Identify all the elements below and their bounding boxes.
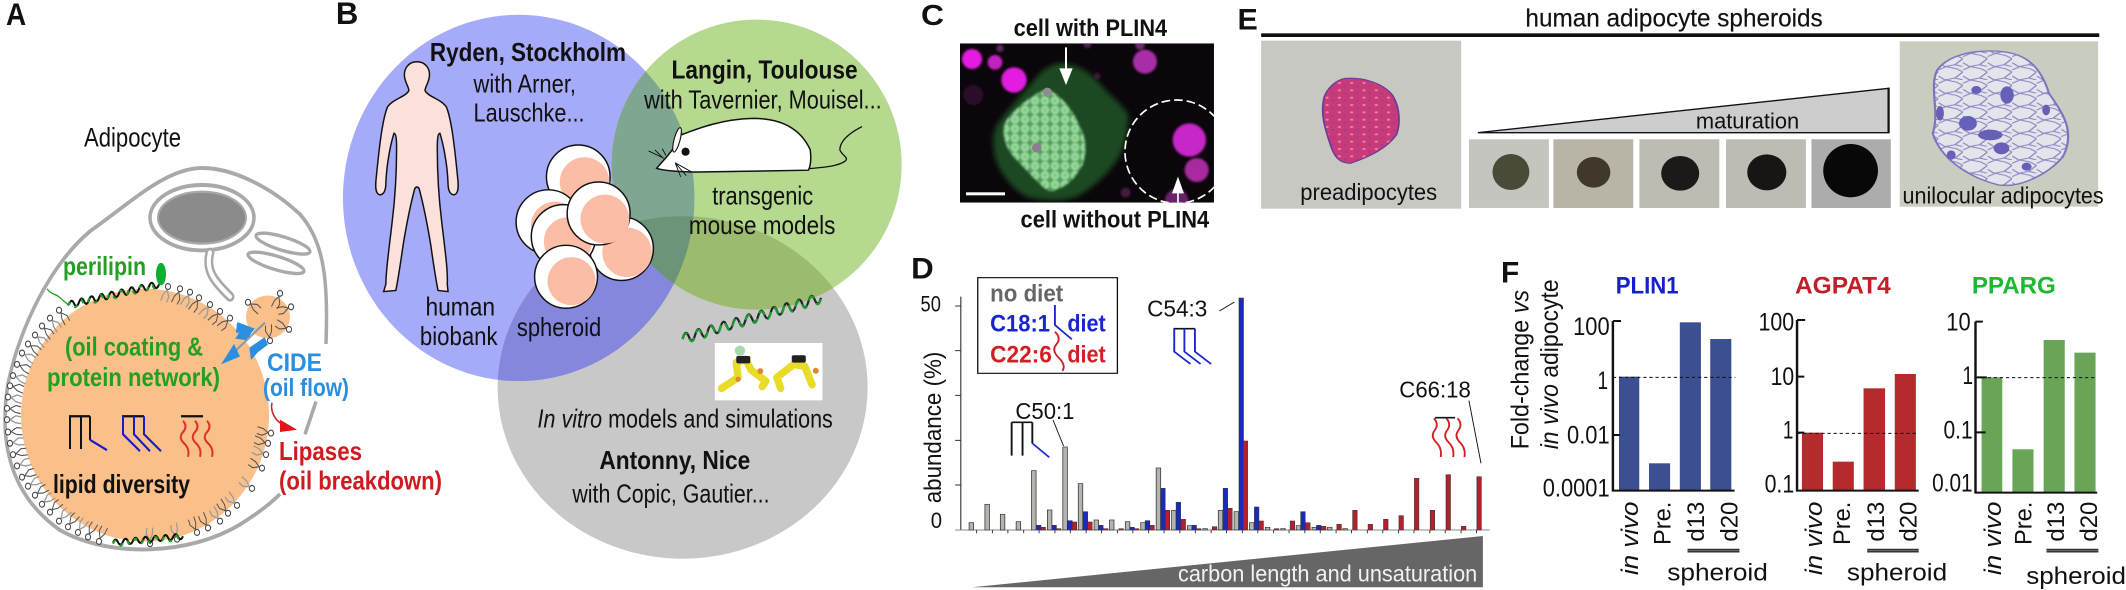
CIDE protein and oil flow arrow (221, 323, 266, 364)
icon: human body (376, 62, 458, 292)
heading: Adipocyte: Adipocyte (84, 123, 181, 153)
label: cell without PLIN4: cell without PLIN4 (1021, 207, 1210, 233)
label maturation: maturation (1696, 109, 1799, 133)
preadipocyte image (1261, 41, 1461, 209)
label lipid diversity: lipid diversity (53, 471, 190, 499)
chart: PPARG: in vivo (1979, 502, 2007, 575)
chart: PLIN1: 0.0001 (1543, 474, 1610, 502)
icon: spheroid of cells (516, 145, 653, 308)
text: Toulouse: Langin, Toulouse (672, 56, 858, 84)
y axis tick labels: 0 (931, 508, 942, 533)
chart: AGPAT4: in vivo (1800, 502, 1827, 575)
panel D: lipidomics bar chart (911, 252, 1490, 587)
chart: PPARG: 1 (1963, 362, 1973, 389)
text: transgenic mouse models: mouse models (689, 212, 835, 240)
legend: diet (1067, 311, 1106, 337)
carbon length wedge (972, 536, 1483, 587)
annotation C54:3: C54:3 (1147, 297, 1207, 322)
chart: PPARG: 0.01 (1932, 469, 1973, 497)
nucleus (150, 185, 254, 250)
header rule (1261, 33, 2099, 37)
chart: PPARG: 0.1 (1943, 416, 1973, 444)
phospholipid monolayer (4, 283, 294, 547)
text: Stockholm: Ryden, Stockholm (430, 39, 626, 67)
label CIDE (263, 349, 349, 401)
label F: F (1501, 255, 1519, 289)
label CIDE: CIDE (267, 349, 322, 376)
heading: human adipocyte spheroids (1525, 4, 1823, 32)
text: Stockholm (430, 39, 626, 127)
text: Stockholm: Lauschke... (474, 99, 585, 127)
label E: E (1238, 2, 1258, 36)
label lipases: (oil breakdown) (279, 467, 442, 496)
legend: no diet (990, 281, 1064, 307)
label perilipin: perilipin (63, 253, 146, 282)
chart: PLIN1: d13 (1682, 502, 1710, 542)
text: Toulouse (643, 56, 882, 114)
fluorescence image (960, 43, 1214, 203)
lipid structure polyunsaturated (181, 416, 212, 457)
C18:1 diet bars (1036, 298, 1321, 530)
annotation C66:18: C66:18 (1399, 378, 1471, 403)
label lipases (279, 438, 442, 496)
lipid structure monounsaturated (122, 416, 161, 451)
panel E: human adipocyte spheroids (1261, 4, 2104, 209)
y axis title: abundance (%) (919, 352, 946, 503)
unilocular adipocyte image (1900, 41, 2104, 208)
text: Nice: Antonny, Nice (599, 447, 750, 475)
label oil coating (47, 333, 220, 392)
chart: AGPAT4: 0.1 (1765, 470, 1794, 498)
chart: AGPAT4: 100 (1759, 308, 1794, 336)
panel C: microscopy (921, 0, 1258, 233)
label C: C (921, 0, 944, 31)
text: Nice (572, 447, 770, 508)
label D: D (911, 252, 934, 285)
lipid structure saturated (69, 416, 107, 450)
y axis tick labels: 50 (921, 292, 941, 316)
maturation wedge (1478, 88, 1889, 133)
perilipin helix bottom (113, 534, 183, 546)
golgi (246, 229, 312, 278)
chart: AGPAT4: 1 (1783, 416, 1793, 444)
label preadipocytes: preadipocytes (1300, 179, 1437, 205)
oil droplet (21, 289, 269, 541)
label CIDE: (oil flow) (263, 374, 349, 401)
annotation C66:18 (1399, 378, 1481, 463)
chart: PPARG: d13 (2042, 502, 2069, 542)
chart: PLIN1: 100 (1573, 313, 1610, 340)
annotation C54:3 (1147, 297, 1234, 364)
chart: PLIN1 (1543, 272, 1768, 586)
legend (978, 278, 1117, 373)
icon: mouse (649, 118, 862, 177)
panel A: adipocyte (4, 0, 442, 549)
text: human biobank (420, 294, 498, 351)
chart: PLIN1: PLIN1 (1616, 272, 1679, 299)
chart: PPARG: PPARG (1972, 272, 2056, 299)
annotation C50:1 (1012, 399, 1074, 457)
heading: cell with PLIN4: cell with PLIN4 (1014, 16, 1168, 42)
circle: Nice (498, 216, 868, 559)
panel B: collaborations Venn diagram (336, 0, 902, 559)
chart: PPARG: 10 (1946, 308, 1971, 336)
chart: PLIN1: 1 (1597, 367, 1608, 394)
annotation C50:1: C50:1 (1015, 399, 1074, 425)
text: human biobank: human (425, 294, 495, 322)
circle: Toulouse (612, 20, 902, 310)
chart: PPARG: d20 (2075, 502, 2103, 542)
text: Stockholm: with Arner, (473, 71, 576, 99)
chart: PLIN1: in vivo (1616, 502, 1644, 575)
chart: AGPAT4 (1759, 272, 1947, 586)
chart: PPARG: Pre. (2010, 502, 2037, 545)
chart: AGPAT4: 10 (1771, 363, 1794, 390)
y axis tick labels (921, 292, 942, 533)
text: transgenic mouse models: transgenic (712, 183, 813, 211)
chart: PLIN1: 0.01 (1567, 421, 1610, 449)
label lipases: Lipases (279, 438, 362, 467)
perilipin ellipse (156, 263, 166, 285)
spheroid time-series images (1469, 139, 1891, 208)
chart: AGPAT4: d20 (1895, 502, 1922, 542)
chart: AGPAT4: Pre. (1828, 502, 1856, 545)
legend: C18:1 (990, 311, 1050, 337)
chart: PLIN1: spheroid (1667, 559, 1768, 586)
chart: PLIN1: d20 (1716, 502, 1743, 542)
label oil coating: protein network) (47, 364, 220, 392)
axes (955, 297, 1490, 533)
text: human biobank: biobank (420, 323, 498, 351)
label oil coating: (oil coating & (65, 333, 203, 362)
text: Nice: with Copic, Gautier... (572, 480, 770, 508)
cell outline (5, 168, 327, 549)
text: transgenic mouse models (689, 183, 835, 240)
budding droplet (246, 296, 290, 338)
y axis title: in vivo adipocyte (1535, 279, 1564, 449)
panel F: gene expression bar charts (1501, 255, 2126, 589)
y axis title: Fold-change vs (1506, 289, 1534, 449)
overlap regions (498, 20, 902, 559)
text: in vitro models: In vitro models and simulations (538, 405, 833, 433)
chart: PPARG (1932, 272, 2126, 589)
chart: AGPAT4: spheroid (1847, 559, 1947, 586)
lipase arrow (272, 403, 297, 432)
chart: AGPAT4: d13 (1862, 502, 1890, 542)
chart: AGPAT4: AGPAT4 (1795, 272, 1891, 299)
no diet bars (969, 447, 1347, 530)
y axis title (1506, 279, 1564, 449)
C22:6 diet bars (1041, 441, 1481, 530)
circle: Stockholm (343, 15, 694, 381)
chart: PLIN1: Pre. (1649, 502, 1676, 545)
legend: diet (1067, 342, 1106, 368)
legend: C22:6 (990, 342, 1052, 368)
text: Toulouse: with Tavernier, Mouisel... (643, 86, 882, 114)
perilipin helix top (47, 283, 159, 307)
endoplasmic reticulum tube (209, 253, 230, 297)
molecular simulation image (715, 343, 822, 400)
text: spheroid: spheroid (517, 314, 601, 342)
helix peptide (683, 296, 821, 341)
carbon length wedge: carbon length and unsaturation (1178, 562, 1477, 587)
